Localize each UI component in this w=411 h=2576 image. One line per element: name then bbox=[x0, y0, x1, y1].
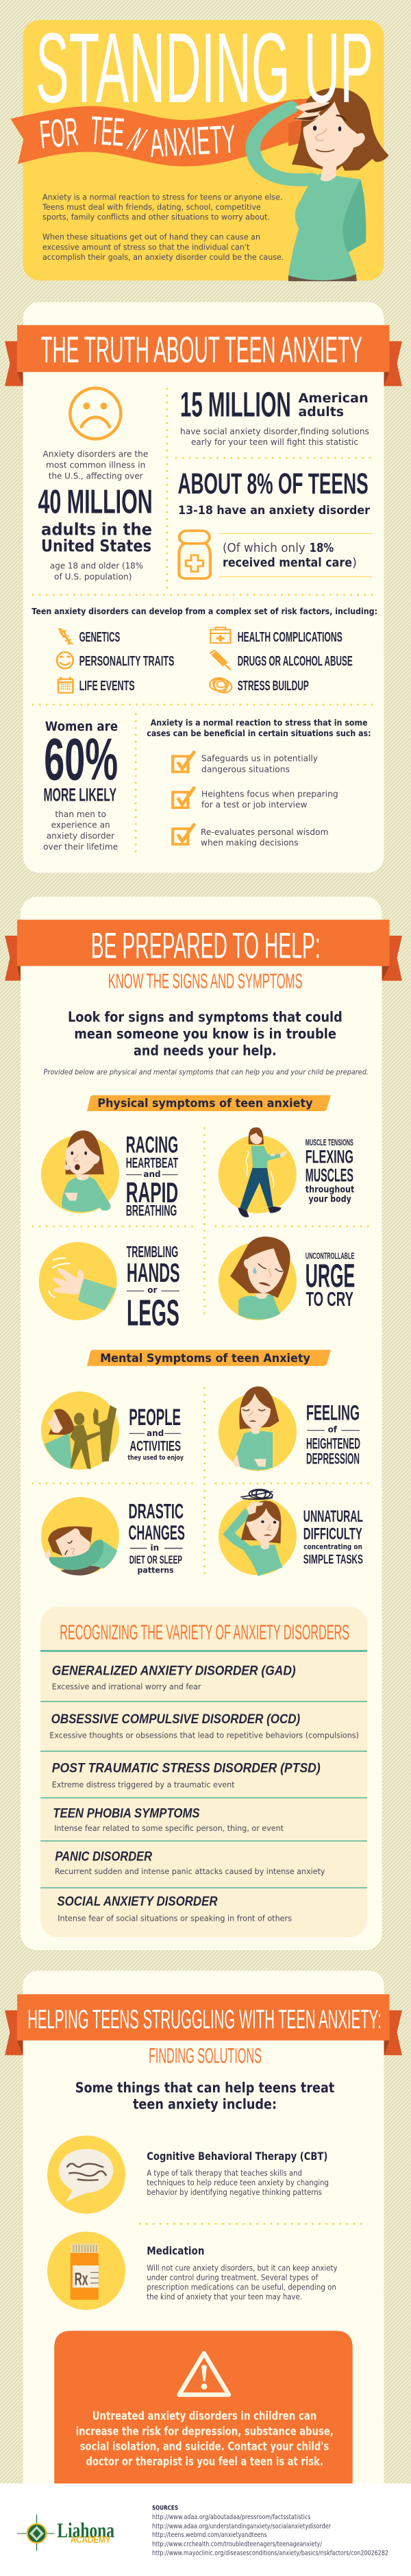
stat: women 60 percent: than men to bbox=[55, 809, 106, 819]
symptom: flexing muscles bbox=[219, 1128, 354, 1217]
stat: 40 million adults: of U.S. population) bbox=[54, 571, 132, 581]
benefits intro: Anxiety is a normal reaction to stress that in some bbox=[151, 718, 367, 728]
label: UNCONTROLLABLE bbox=[306, 1251, 355, 1261]
pill: physical symptoms: Physical symptoms of teen anxiety bbox=[97, 1097, 312, 1110]
benefits intro: cases can be beneficial in certain situations such as: bbox=[147, 728, 371, 738]
solution: CBT bbox=[47, 2136, 329, 2214]
banner bbox=[5, 1994, 402, 2055]
label bbox=[126, 1243, 179, 1333]
label bbox=[306, 1138, 354, 1204]
icon: check one bbox=[173, 751, 195, 772]
pill: mental symptoms: Mental Symptoms of teen Anxiety bbox=[100, 1352, 310, 1365]
stat: women 60 percent: experience an bbox=[51, 820, 110, 830]
stat: mental care bbox=[219, 533, 372, 576]
icon: check three bbox=[173, 823, 195, 845]
icon: prescription bottle: Rx bbox=[75, 2269, 88, 2289]
symptom: people and activities bbox=[41, 1392, 184, 1470]
illustration: sad girl bbox=[234, 1387, 279, 1470]
label: RACING bbox=[126, 1132, 178, 1158]
panel: be prepared to help bbox=[5, 897, 402, 1950]
ribbon subtitle: ANXIETY bbox=[149, 117, 237, 166]
symptom: urge to cry bbox=[219, 1237, 355, 1320]
disorder: GAD: GENERALIZED ANXIETY DISORDER (GAD) bbox=[52, 1664, 296, 1678]
sources bbox=[152, 2505, 388, 2557]
stat: 15 million American adults: early for your teen will fight this statistic bbox=[191, 437, 358, 447]
stat: mental care: received mental care bbox=[223, 556, 352, 570]
benefits checklist: for a test or job interview bbox=[201, 799, 307, 810]
logo: Liahona Academy bbox=[17, 2514, 114, 2551]
icon: check two bbox=[173, 787, 195, 807]
stat: 40 million adults: most common illness in bbox=[46, 460, 145, 470]
label: TO CRY bbox=[306, 1289, 353, 1311]
icon: sad face bbox=[70, 388, 121, 439]
label: FLEXING bbox=[306, 1147, 353, 1167]
icon: smile bbox=[57, 652, 73, 668]
stat: women 60 percent: over their lifetime bbox=[43, 841, 118, 851]
panel: anxiety disorders bbox=[40, 1607, 367, 1937]
label bbox=[127, 1405, 184, 1461]
symptom: unnatural difficulty bbox=[219, 1489, 363, 1576]
stat: women 60 percent: anxiety disorder bbox=[47, 830, 115, 840]
intro text: sports, family conflicts and other situations to worry about. bbox=[42, 212, 270, 221]
label: concentrating on bbox=[303, 1543, 362, 1551]
label: HEIGHTENED bbox=[306, 1435, 360, 1452]
disorder: OCD: OBSESSIVE COMPULSIVE DISORDER (OCD) bbox=[51, 1712, 300, 1727]
label: DRASTIC bbox=[129, 1500, 184, 1523]
label: CHANGES bbox=[129, 1522, 185, 1544]
icon: medicine jar bbox=[179, 531, 210, 579]
intro text: excessive amount of stress so that the individual can't bbox=[42, 243, 250, 252]
label: or bbox=[147, 1285, 157, 1295]
benefits intro bbox=[147, 718, 371, 738]
solution: medication: prescription medications can be useful, depending on bbox=[147, 2282, 336, 2292]
intro text: Anxiety is a normal reaction to stress for teens or anyone else. bbox=[42, 193, 282, 202]
callout: warning: doctor or therapist is you feel a teen is at risk. bbox=[86, 2455, 323, 2468]
stat: 40 million adults: 40 MILLION bbox=[38, 483, 153, 520]
stat: 15 million American adults: have social anxiety disorder,finding solutions bbox=[180, 426, 369, 436]
solution: CBT: A type of talk therapy that teaches skills and bbox=[147, 2168, 302, 2178]
stat: mental care: 18% bbox=[310, 541, 334, 555]
disorder: social anxiety bbox=[57, 1895, 292, 1923]
benefits checklist bbox=[173, 751, 338, 848]
label: your body bbox=[308, 1194, 351, 1204]
risk factors list: STRESS BUILDUP bbox=[238, 679, 309, 694]
lead text: Look for signs and symptoms that could bbox=[68, 1009, 342, 1025]
banner bbox=[5, 920, 402, 981]
illustration: teen girl saluting bbox=[253, 88, 389, 281]
ribbon subtitle: FOR bbox=[38, 110, 80, 157]
logo: Liahona Academy: Liahona bbox=[57, 2518, 114, 2542]
solution: CBT: behavior by identifying negative thinking patterns bbox=[147, 2187, 322, 2197]
icon: calendar bbox=[58, 677, 73, 693]
disorder: PTSD: Extreme distress triggered by a traumatic event bbox=[52, 1779, 235, 1789]
label: LEGS bbox=[127, 1292, 179, 1333]
icon: speech bubble bbox=[59, 2149, 113, 2202]
disorder: PTSD bbox=[52, 1762, 321, 1789]
solution: CBT: techniques to help reduce teen anxiety by changing bbox=[147, 2178, 329, 2187]
illustration: tense figure bbox=[238, 1128, 287, 1217]
risk factors list: LIFE EVENTS bbox=[79, 679, 135, 694]
solution: medication bbox=[47, 2232, 338, 2310]
illustration: withdrawn girl and silhouettes bbox=[45, 1405, 116, 1469]
disorder: GAD: Excessive and irrational worry and fear bbox=[52, 1681, 201, 1691]
label: in bbox=[150, 1543, 159, 1553]
disorder: phobia bbox=[53, 1806, 284, 1833]
lead text bbox=[75, 2079, 335, 2113]
stat: women 60 percent: MORE LIKELY bbox=[44, 784, 116, 805]
stat: 8 percent of teens: 13-18 have an anxiety disorder bbox=[178, 504, 371, 518]
stat: women 60 percent bbox=[43, 720, 118, 851]
disorder: OCD: Excessive thoughts or obsessions that lead to repetitive behaviors (compulsions) bbox=[49, 1731, 359, 1740]
disorder: panic: Recurrent sudden and intense panic attacks caused by intense anxiety bbox=[55, 1867, 325, 1876]
callout: warning bbox=[54, 2331, 353, 2483]
stat: 40 million adults: adults in the bbox=[41, 520, 152, 539]
ribbon subtitle: N bbox=[121, 121, 153, 158]
label: DEPRESSION bbox=[306, 1450, 360, 1468]
sources: http://teens.webmd.com/anxietyandteens bbox=[152, 2531, 267, 2539]
label: BREATHING bbox=[126, 1202, 177, 1219]
sources: http://www.crchealth.com/troubledteenagers/teenageanxiety/ bbox=[152, 2540, 323, 2548]
disorder: OCD bbox=[49, 1712, 359, 1740]
benefits checklist: Re-evaluates personal wisdom bbox=[201, 827, 329, 837]
note: Provided below are physical and mental symptoms that can help you and your child be prepared. bbox=[44, 1068, 369, 1077]
intro text: Teens must deal with friends, dating, school, competitive bbox=[42, 202, 261, 212]
solution: medication: the kind of anxiety that your teen may have. bbox=[147, 2292, 302, 2301]
lead text: teen anxiety include: bbox=[133, 2096, 277, 2113]
stat: 15 million American adults: American bbox=[299, 391, 369, 406]
label: SIMPLE TASKS bbox=[303, 1552, 363, 1566]
label: HANDS bbox=[127, 1259, 179, 1288]
risk factors list: GENETICS bbox=[79, 630, 120, 645]
icon: medical kit bbox=[210, 627, 230, 643]
ribbon bbox=[10, 98, 312, 167]
intro text bbox=[42, 193, 284, 262]
label bbox=[306, 1400, 360, 1468]
label: DIET OR SLEEP bbox=[129, 1553, 182, 1566]
label: of bbox=[328, 1424, 338, 1434]
stat: 15 million American adults bbox=[180, 385, 369, 447]
label bbox=[306, 1251, 355, 1311]
symptom: trembling hands bbox=[39, 1242, 179, 1333]
logo: Liahona Academy: ACADEMY bbox=[71, 2534, 111, 2544]
panel: the truth about teen anxiety bbox=[5, 302, 402, 873]
label: RAPID bbox=[126, 1176, 178, 1208]
stat: women 60 percent: Women are bbox=[45, 720, 118, 734]
label: UNNATURAL bbox=[303, 1507, 363, 1526]
callout: warning: increase the risk for depression, substance abuse, bbox=[76, 2425, 334, 2438]
icon: dna bbox=[58, 629, 73, 645]
label: throughout bbox=[306, 1184, 354, 1195]
ribbon subtitle: TEE bbox=[89, 108, 126, 155]
lead text: mean someone you know is in trouble bbox=[74, 1025, 336, 1042]
label: MUSCLE TENSIONS bbox=[306, 1138, 353, 1147]
stat: 40 million adults: age 18 and older (18% bbox=[50, 560, 143, 570]
disorder: GAD bbox=[52, 1664, 296, 1691]
disorder: social anxiety: SOCIAL ANXIETY DISORDER bbox=[57, 1895, 218, 1909]
label: patterns bbox=[137, 1565, 174, 1575]
lead text: Some things that can help teens treat bbox=[75, 2079, 335, 2095]
solution: CBT: Cognitive Behavioral Therapy (CBT) bbox=[147, 2150, 327, 2163]
label: and bbox=[143, 1169, 161, 1179]
label: FEELING bbox=[306, 1400, 360, 1425]
stat: 40 million adults: the U.S., affecting over bbox=[49, 471, 143, 481]
illustration: sleeping girl bbox=[45, 1527, 117, 1575]
label bbox=[129, 1500, 185, 1575]
symptom: drastic changes bbox=[41, 1497, 185, 1575]
stat: 8 percent of teens bbox=[178, 467, 371, 518]
illustration: shaking hand bbox=[49, 1258, 116, 1311]
disorder: panic bbox=[55, 1849, 325, 1876]
label bbox=[126, 1132, 178, 1219]
disorder: phobia: Intense fear related to some specific person, thing, or event bbox=[54, 1823, 284, 1833]
stat: 40 million adults bbox=[38, 449, 153, 581]
sources: http://www.adaa.org/understandinganxiety/socialanxietydisorder bbox=[152, 2523, 331, 2530]
benefits checklist: when making decisions bbox=[201, 838, 299, 848]
solution: medication: Medication bbox=[147, 2244, 204, 2257]
symptom: racing heartbeat bbox=[41, 1130, 178, 1219]
label: ACTIVITIES bbox=[129, 1439, 181, 1455]
callout: warning: social isolation, and suicide. Contact your child's bbox=[80, 2440, 329, 2453]
subheading: FINDING SOLUTIONS bbox=[149, 2043, 262, 2067]
stat: women 60 percent: 60% bbox=[44, 727, 118, 792]
symptom: heightened depression bbox=[219, 1387, 360, 1471]
risk factors list: HEALTH COMPLICATIONS bbox=[238, 630, 342, 645]
disorder: social anxiety: Intense fear of social situations or speaking in front of others bbox=[58, 1913, 292, 1923]
benefits checklist: dangerous situations bbox=[201, 764, 290, 775]
icon: warning triangle bbox=[179, 2353, 229, 2395]
illustration: girl breathing fast bbox=[62, 1130, 110, 1212]
stat: 15 million American adults: 15 MILLION bbox=[180, 385, 291, 424]
panel: hero bbox=[10, 12, 389, 281]
solution: medication: under control during treatment. Several types of bbox=[147, 2272, 319, 2282]
label: HEARTBEAT bbox=[126, 1155, 178, 1171]
lead text: and needs your help. bbox=[134, 1042, 277, 1058]
label: MUSCLES bbox=[306, 1165, 353, 1185]
sources: http://www.adaa.org/aboutadaa/pressroom/factsstatistics bbox=[152, 2514, 311, 2521]
label: URGE bbox=[306, 1258, 355, 1294]
icon: syringe bbox=[210, 650, 231, 670]
illustration: confused girl with scribble bbox=[223, 1489, 283, 1576]
icon: scribble bbox=[210, 677, 234, 695]
stat: 15 million American adults: adults bbox=[299, 405, 344, 420]
disorder: PTSD: POST TRAUMATIC STRESS DISORDER (PTSD) bbox=[52, 1762, 321, 1776]
lead text bbox=[68, 1009, 342, 1058]
stat: 40 million adults: United States bbox=[41, 536, 151, 555]
risk factors list bbox=[57, 627, 353, 695]
label: TREMBLING bbox=[126, 1243, 178, 1261]
label: and bbox=[147, 1429, 164, 1438]
benefits checklist: Safeguards us in potentially bbox=[201, 753, 319, 764]
risk factors list: PERSONALITY TRAITS bbox=[79, 654, 174, 669]
ribbon subtitle bbox=[38, 108, 237, 166]
solution: medication: Will not cure anxiety disorders, but it can keep anxiety bbox=[147, 2263, 338, 2272]
label: they used to enjoy bbox=[127, 1454, 184, 1461]
panel: finding solutions bbox=[5, 1971, 402, 2483]
intro text: When these situations get out of hand they can cause an bbox=[42, 232, 260, 242]
benefits checklist: Heightens focus when preparing bbox=[201, 788, 338, 799]
disorder: panic: PANIC DISORDER bbox=[55, 1849, 152, 1864]
banner bbox=[5, 325, 402, 386]
stat: mental care: ) bbox=[352, 556, 357, 570]
risk factors heading: Teen anxiety disorders can develop from a complex set of risk factors, including: bbox=[32, 607, 377, 616]
disorder: phobia: TEEN PHOBIA SYMPTOMS bbox=[53, 1806, 200, 1821]
sources: SOURCES bbox=[152, 2505, 178, 2512]
intro text: accomplish their goals, an anxiety disorder could be the cause. bbox=[42, 252, 284, 262]
label: DIFFICULTY bbox=[303, 1525, 362, 1544]
icon: prescription bottle bbox=[71, 2244, 99, 2300]
stat: 40 million adults: Anxiety disorders are the bbox=[42, 449, 149, 459]
label bbox=[303, 1507, 363, 1566]
illustration: crying girl bbox=[230, 1237, 290, 1320]
stat: mental care: (Of which only bbox=[223, 541, 306, 555]
callout: warning: Untreated anxiety disorders in children can bbox=[92, 2409, 316, 2422]
label: PEOPLE bbox=[129, 1405, 181, 1431]
